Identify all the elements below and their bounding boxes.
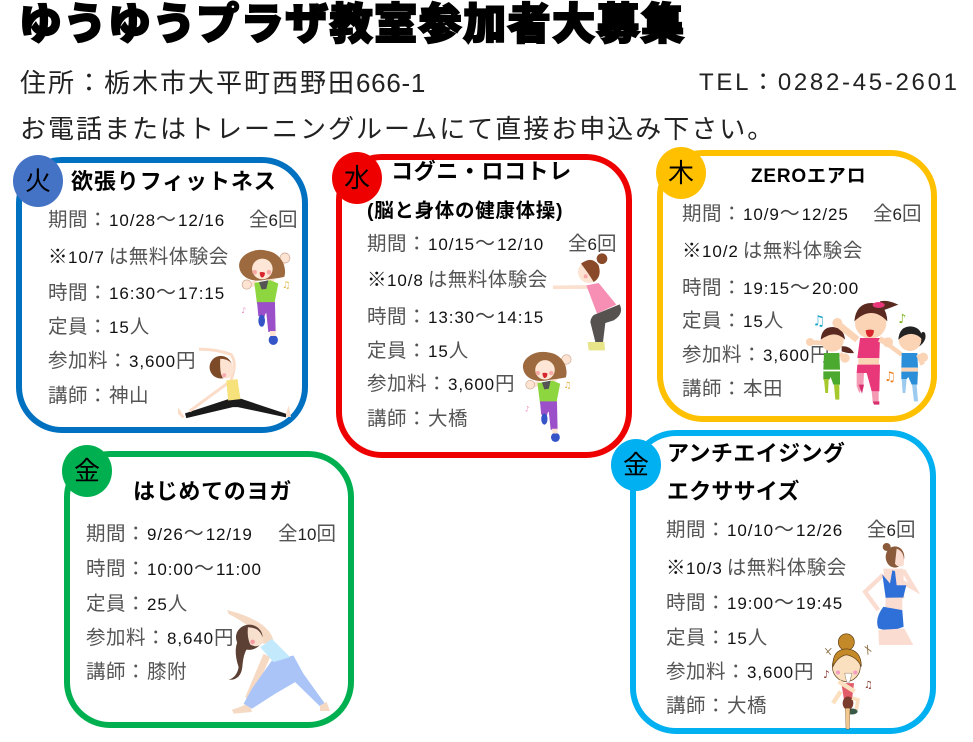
instructor: 大橋 <box>727 695 767 717</box>
instructor: 神山 <box>109 385 149 407</box>
telephone: TEL：0282-45-2601 <box>699 69 960 96</box>
time: 10:00～11:00 <box>147 558 262 580</box>
time: 16:30～17:15 <box>109 282 225 304</box>
period <box>666 519 916 541</box>
time: 時間： <box>682 277 742 299</box>
free trial note: ※10/8は無料体験会 <box>367 269 548 291</box>
illustration: cheering woman: ♫ <box>282 280 290 291</box>
instructor: 大橋 <box>428 408 468 430</box>
time: 時間： <box>86 558 146 580</box>
class subtitle: (脳と身体の健康体操) <box>367 200 563 222</box>
capacity: 15人 <box>109 316 150 338</box>
title: ゆうゆうプラザ教室参加者大募集 <box>19 1 686 49</box>
fee <box>86 627 234 649</box>
capacity <box>682 310 784 332</box>
fee: 8,640円 <box>167 627 234 649</box>
panel: Friday anti-aging exercise class <box>611 430 936 734</box>
time: 19:15～20:00 <box>743 277 859 299</box>
illustration: yoga side bend <box>227 610 330 714</box>
fee: 参加料： <box>682 344 762 366</box>
time <box>666 592 843 614</box>
period: 10/15～12/10 <box>428 233 544 255</box>
capacity: 25人 <box>147 593 188 615</box>
day badge: Friday <box>62 445 112 497</box>
day badge: Thursday <box>656 147 706 199</box>
capacity: 定員： <box>682 310 742 332</box>
instructor <box>682 378 783 400</box>
fee <box>682 344 830 366</box>
capacity: 15人 <box>428 340 469 362</box>
capacity: 定員： <box>666 627 726 649</box>
class name line 1: アンチエイジング <box>667 441 845 466</box>
period <box>48 209 298 231</box>
instructor <box>666 694 767 718</box>
time <box>86 558 262 580</box>
period <box>86 523 336 545</box>
free trial note: ※10/2は無料体験会 <box>682 240 863 262</box>
time <box>48 282 225 304</box>
illustration: woman with hair bun jogging: ♫ <box>864 680 873 691</box>
period: 10/10～12/26 <box>727 519 843 541</box>
fee <box>367 373 515 395</box>
panel border <box>64 451 354 728</box>
period: 期間： <box>682 203 742 225</box>
fee: 3,600円 <box>763 344 830 366</box>
time: 時間： <box>367 306 427 328</box>
fee: 参加料： <box>666 661 746 683</box>
left child <box>810 335 823 350</box>
fee: 3,600円 <box>747 661 814 683</box>
period: 期間： <box>86 523 146 545</box>
instructor: 講師： <box>48 385 108 407</box>
day badge: Tuesday <box>13 155 63 207</box>
free trial note: ※10/3は無料体験会 <box>666 557 847 579</box>
fee <box>666 661 814 683</box>
instructor: 講師： <box>682 378 742 400</box>
fee: 3,600円 <box>129 350 196 372</box>
period: 10/9～12/25 <box>743 203 849 225</box>
panel: Friday anti-aging exercise class: 全6回 <box>867 519 916 541</box>
fee: 3,600円 <box>448 373 515 395</box>
instructor <box>48 385 149 407</box>
capacity <box>666 627 768 649</box>
panel: Friday beginner yoga class: 全10回 <box>278 523 336 545</box>
illustration: woman in blue sportswear <box>863 542 917 645</box>
instructor <box>86 661 187 683</box>
instructor: 講師： <box>367 408 427 430</box>
illustration: stretching woman in splits <box>178 348 291 418</box>
illustration: cheering woman: ♪ <box>525 404 530 413</box>
panel border <box>336 154 632 458</box>
period: 期間： <box>48 209 108 231</box>
illustration: squatting woman <box>553 253 622 350</box>
time: 13:30～14:15 <box>428 306 544 328</box>
address: 住所：栃木市大平町西野田666-1 <box>20 68 426 98</box>
illustration: cheering woman: ♫ <box>564 381 572 391</box>
period <box>367 233 616 255</box>
class name: 欲張りフィットネス <box>71 169 277 194</box>
period: 期間： <box>666 519 726 541</box>
fee <box>48 350 196 372</box>
panel: Thursday aerobics class: 全6回 <box>873 203 922 225</box>
panel: Friday beginner yoga class <box>62 445 354 728</box>
panel border <box>16 157 308 433</box>
instructor: 本田 <box>743 378 783 400</box>
illustration: cheering woman: ♪ <box>241 306 246 315</box>
panel: Wednesday cognitive and locomotive class <box>332 152 632 458</box>
period: 9/26～12/19 <box>147 523 253 545</box>
period: 10/28～12/16 <box>109 209 225 231</box>
period: 期間： <box>367 233 427 255</box>
illustration: three dancing people: ♪ <box>898 311 906 326</box>
capacity: 定員： <box>86 593 146 615</box>
class name: はじめてのヨガ <box>133 479 292 504</box>
capacity <box>367 340 469 362</box>
time: 時間： <box>48 282 108 304</box>
time <box>367 306 544 328</box>
free trial note: ※10/7は無料体験会 <box>48 246 229 268</box>
instructor: 講師： <box>666 695 726 717</box>
capacity <box>48 316 150 338</box>
class name: コグニ・ロコトレ <box>391 159 572 184</box>
class name line 2: エクササイズ <box>667 479 800 504</box>
illustration: cheering woman <box>522 352 572 442</box>
day badge: Friday <box>611 439 661 491</box>
time: 時間： <box>666 592 726 614</box>
day badge: Thursday: 木 <box>668 158 694 188</box>
capacity: 15人 <box>727 627 768 649</box>
day badge: Friday: 金 <box>74 456 100 486</box>
capacity: 定員： <box>367 340 427 362</box>
panel: Wednesday cognitive and locomotive class: 全6回 <box>568 233 616 255</box>
panel border <box>657 150 937 422</box>
period <box>682 203 922 225</box>
fee: 参加料： <box>367 373 447 395</box>
day badge: Wednesday: 水 <box>344 163 370 193</box>
illustration: woman with hair bun jogging: ♪ <box>823 668 830 681</box>
illustration: three dancing people <box>806 300 928 405</box>
day badge: Wednesday <box>332 152 382 204</box>
instructor: 膝附 <box>147 661 187 683</box>
class name: ZEROエアロ <box>751 166 866 187</box>
illustration: cheering woman <box>239 250 290 345</box>
panel: Tuesday fitness class <box>13 155 308 433</box>
capacity: 定員： <box>48 316 108 338</box>
illustration: three dancing people: ♫ <box>884 370 896 385</box>
day badge: Friday: 金 <box>623 450 649 480</box>
time: 19:00～19:45 <box>727 592 843 614</box>
application note: お電話またはトレーニングルームにて直接お申込み下さい。 <box>20 114 775 144</box>
day badge: Tuesday: 火 <box>25 166 51 196</box>
time <box>682 277 859 299</box>
fee: 参加料： <box>86 627 166 649</box>
right child <box>888 345 902 355</box>
capacity <box>86 593 188 615</box>
music notes: ♫ <box>813 314 825 330</box>
panel: Tuesday fitness class: 全6回 <box>249 209 298 231</box>
instructor: 講師： <box>86 661 146 683</box>
capacity: 15人 <box>743 310 784 332</box>
illustration: woman with hair bun jogging <box>823 633 873 730</box>
instructor <box>367 408 468 430</box>
panel border <box>630 430 936 734</box>
panel: Thursday aerobics class <box>656 147 937 422</box>
fee: 参加料： <box>48 350 128 372</box>
center woman <box>837 323 857 340</box>
